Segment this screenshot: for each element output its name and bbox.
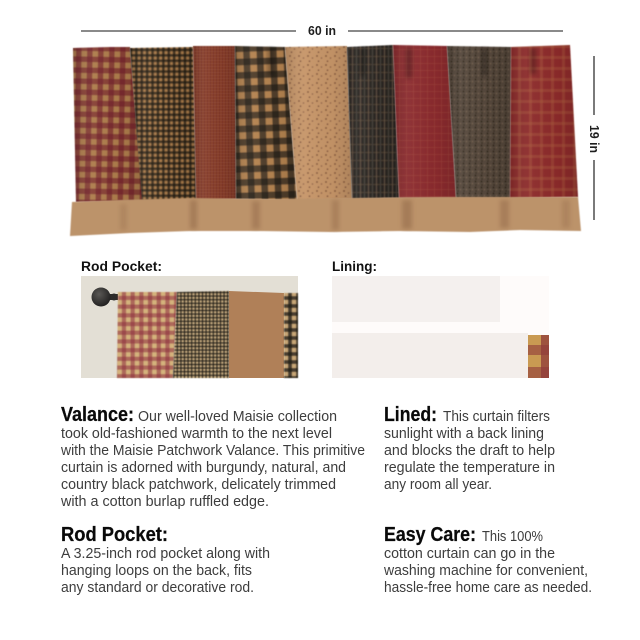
text block: Lined: This curtain filters (443, 409, 550, 425)
patch 4: large black check (235, 46, 297, 200)
text block: Valance (60, 404, 365, 510)
curtain rod finial (92, 288, 118, 306)
text block: Lined: any room all year. (384, 477, 492, 493)
text block: Easy Care: washing machine for convenient, (383, 563, 588, 579)
text block: Easy Care: This 100% (482, 529, 543, 545)
heading: Rod Pocket photo: Rod Pocket: (81, 259, 162, 274)
curtain patches (117, 291, 298, 378)
height dimension: 19 in: 19 in (587, 125, 602, 153)
patch 1: burgundy check (73, 47, 143, 202)
text block: Easy Care: cotton curtain can go in the (384, 546, 555, 562)
photo: rod pocket (81, 276, 298, 378)
text block: Easy Care: Easy Care: (384, 524, 476, 546)
text block: Valance: curtain is adorned with burgundy, natural, and (61, 460, 346, 476)
fabric fold shading (73, 45, 578, 202)
text block: Easy Care (383, 524, 592, 596)
burlap ruffle (70, 197, 581, 236)
text block: Rod Pocket (61, 524, 270, 596)
patch 9: red tan plaid (510, 45, 578, 198)
width dimension: 60 in: 60 in (308, 23, 336, 38)
patch 5: tan speckled print (285, 46, 352, 200)
text block: Lined: regulate the temperature in (384, 460, 555, 476)
text block: Valance: country black patchwork, delicately trimmed (61, 477, 336, 493)
text block: Valance: with a cotton burlap ruffled edge. (60, 494, 269, 510)
text block: Rod Pocket: any standard or decorative rod. (61, 580, 254, 596)
text block: Easy Care: hassle-free home care as needed. (384, 580, 592, 596)
text block: Valance: Valance: (61, 404, 134, 426)
text block: Valance: Our well-loved Maisie collection (138, 409, 337, 425)
photo: lining (332, 276, 549, 378)
text block: Lined: Lined: (384, 404, 437, 426)
patch 6: black fine plaid (347, 45, 399, 199)
patch 2: small black check (130, 47, 196, 201)
plaid swatch (528, 335, 549, 378)
text block: Lined (384, 404, 555, 493)
patch 7: red plaid (393, 45, 456, 198)
text block: Rod Pocket: A 3.25-inch rod pocket along with (61, 546, 270, 562)
patch 3: rust waffle (193, 46, 236, 200)
text block: Valance: with the Maisie Patchwork Valance. This primitive (60, 443, 365, 459)
heading: Lining photo: Lining: (332, 259, 377, 274)
text block: Rod Pocket: hanging loops on the back, fits (61, 563, 252, 579)
text block: Lined: sunlight with a back lining (384, 426, 544, 442)
patch 8: dark brown speckled print (447, 46, 511, 198)
text block: Valance: took old-fashioned warmth to the next level (61, 426, 332, 442)
text block: Lined: and blocks the draft to help (384, 443, 555, 459)
valance photo (70, 45, 581, 236)
text block: Rod Pocket: Rod Pocket: (61, 524, 168, 546)
